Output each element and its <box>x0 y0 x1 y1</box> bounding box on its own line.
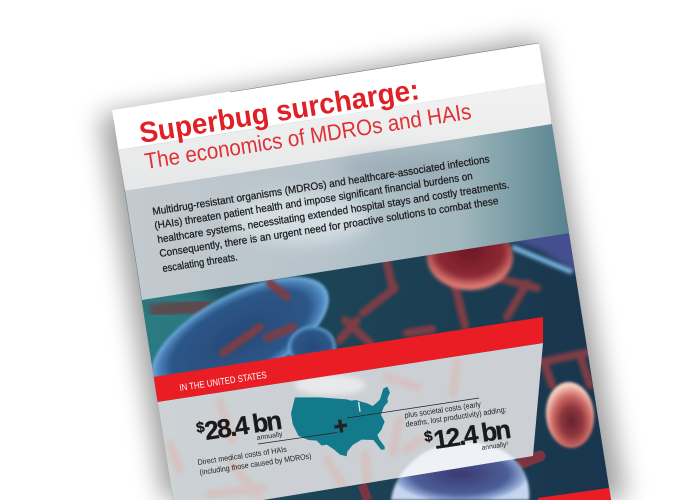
stat: 28.4 bn: 28.4 bn <box>202 405 284 446</box>
red blood cell right <box>543 380 597 450</box>
header band <box>118 83 552 191</box>
pale bacterium top through panel <box>398 442 516 478</box>
red band <box>153 317 543 402</box>
divider lines <box>258 398 479 444</box>
glow in panel <box>295 375 365 395</box>
direct medical costs text: Direct medical costs of HAIs <box>197 445 287 467</box>
blue streak <box>512 247 572 272</box>
annually: annually <box>256 431 284 442</box>
stat: 12.4 bn: 12.4 bn <box>431 414 513 455</box>
light patch <box>230 192 370 244</box>
red haze left <box>150 304 212 312</box>
darker patch <box>340 154 480 182</box>
red bulb <box>424 242 516 293</box>
purple glow <box>512 228 576 276</box>
subtitle: The economics of MDROs and HAIs <box>143 99 473 174</box>
intro text: escalating threats. <box>162 251 239 275</box>
intro text: Consequently, there is an urgent need for proactive solutions to combat these <box>159 195 499 260</box>
faint rods in panel <box>170 363 457 494</box>
direct medical costs text: (including those caused by MDROs) <box>199 451 312 477</box>
intro text: healthcare systems, necessitating extended hospital stays and costly treatments. <box>157 179 510 246</box>
societal costs text: deaths, lost productivity) adding: <box>405 405 507 429</box>
annually with footnote: annually¹ <box>481 441 510 452</box>
panel: in the United States <box>157 343 543 500</box>
stat: 28.4 bn: $ <box>195 419 207 437</box>
dark red rod <box>522 456 540 463</box>
societal costs text: plus societal costs (early <box>404 400 482 420</box>
teal haze <box>140 290 216 372</box>
photo: bacteria background <box>100 120 630 500</box>
icon: US map <box>291 387 390 456</box>
red rods <box>223 263 590 385</box>
lower blue bacterium <box>390 459 532 500</box>
intro text <box>152 153 510 275</box>
large blue bacterium <box>152 276 338 384</box>
lower red band <box>538 487 615 500</box>
intro panel overlay <box>125 124 570 300</box>
intro text: (HAIs) threaten patient health and impose significant financial burdens on <box>154 170 474 232</box>
white title area <box>112 43 546 150</box>
page shadow <box>100 38 626 500</box>
infographic page <box>100 43 630 500</box>
intro text: Multidrug-resistant organisms (MDROs) and healthcare-associated infections <box>152 153 490 218</box>
top edge line <box>230 43 539 92</box>
title: Superbug surcharge: <box>137 74 422 150</box>
band label: IN THE UNITED STATES <box>179 370 267 394</box>
stat: 12.4 bn: $ <box>423 428 435 446</box>
plus sign: + <box>332 412 350 441</box>
